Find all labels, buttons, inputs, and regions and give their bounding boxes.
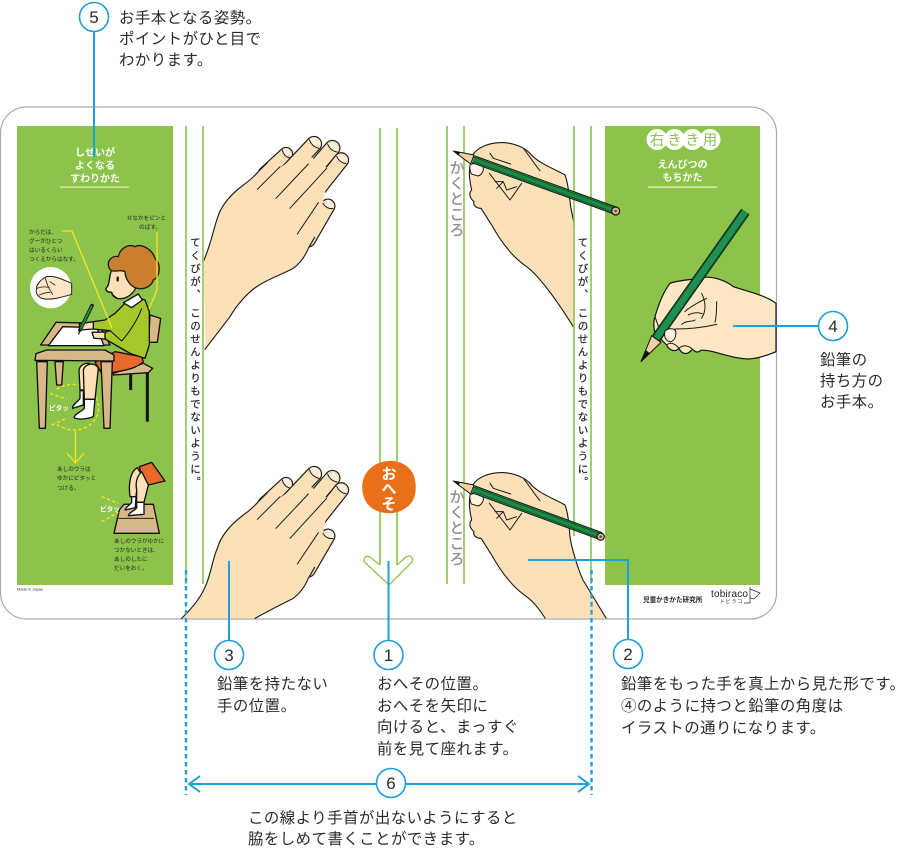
logo: tobiraco [711, 587, 760, 605]
note: distance from desk: はいるくらい [29, 247, 63, 254]
vertical text: right wrist guide: てくびが、 このせんよりもでないように。 [576, 237, 588, 489]
callout 1: navel position [374, 561, 519, 758]
vertical text: writing area lower: かくところ [448, 489, 464, 566]
callout 1: navel position: おへそを矢印に [377, 697, 488, 715]
callout 4: model pencil grip: 4 [828, 317, 838, 336]
badge: right-handed: 用 [703, 133, 717, 149]
callout 5: model posture: ポイントがひと目で [119, 30, 262, 48]
callout 2: writing hand from above [528, 560, 900, 737]
rear leg and foot [73, 363, 89, 408]
callout 3: free hand position: 手の位置。 [217, 697, 296, 715]
pencil in child's hand [79, 306, 92, 334]
callout 5: model posture: わかります。 [119, 51, 213, 69]
note: distance from desk: グーがひとつ [29, 237, 63, 245]
callout 3: free hand position: 3 [224, 646, 234, 665]
illustration: lower writing hand with pencil [453, 473, 606, 618]
callout 4: model pencil grip: 持ち方の [820, 372, 884, 390]
callout 2: writing hand from above: ④のように持つと鉛筆の角度は [621, 697, 843, 715]
heading: posture guide: よくなる [75, 160, 115, 172]
front leg and foot [74, 364, 98, 419]
heading: posture guide [60, 146, 129, 188]
callout 3: free hand position: 鉛筆を持たない [217, 675, 328, 693]
badge: right-handed: 右 [650, 132, 664, 149]
badge: navel marker [362, 461, 416, 513]
hair [108, 246, 159, 289]
badge: right-handed [646, 129, 720, 150]
logo: tobiraco: tobiraco [711, 589, 748, 600]
label: made in japan: Made in Japan [17, 586, 43, 592]
note: use a step: あしのウラがゆかに [114, 537, 165, 545]
illustration: legs on step box [100, 462, 165, 533]
heading: pencil grip: もちかた [662, 172, 702, 184]
note: distance from desk [29, 229, 79, 263]
indicator: foot contact on floor: ピタッ [49, 404, 69, 413]
callout 2: writing hand from above: イラストの通りになります。 [621, 719, 826, 737]
note: straighten back: せなかをピンと [127, 215, 166, 222]
callout 3: free hand position [214, 561, 328, 715]
guide lines: green columns [186, 126, 591, 584]
heading: pencil grip [648, 159, 717, 188]
sweater with arms [93, 298, 149, 358]
callout 5: model posture: お手本となる姿勢。 [119, 9, 262, 27]
callout 4: model pencil grip: 鉛筆の [820, 351, 868, 369]
note: use a step [114, 537, 165, 572]
floor contact arrow [67, 431, 84, 463]
collar [123, 294, 142, 308]
illustration: child seated at desk [35, 246, 161, 428]
logo: tobiraco: トビラコ [720, 598, 743, 605]
heading: posture guide: しせいが [75, 146, 115, 159]
note: feet on floor [57, 465, 96, 492]
note: feet on floor: あしのウラは [57, 465, 91, 473]
yellow pointer lines [62, 231, 157, 328]
indicator: foot contact on floor [49, 384, 99, 430]
vertical text: left wrist guide: てくびが、 このせんよりもでないように。 [189, 237, 201, 489]
chair [113, 315, 161, 422]
note: straighten back: のばす。 [139, 223, 161, 231]
callout 6: wrist limit span: 6 [386, 774, 396, 793]
badge: right-handed: き [667, 132, 682, 149]
icon: fist in circle [30, 267, 72, 308]
callout 4: model pencil grip: お手本。 [820, 393, 884, 411]
hands [79, 322, 105, 339]
illustration: lower non-writing hand [182, 468, 347, 618]
note: feet on floor: ゆかにピタッと [57, 474, 96, 482]
heading: posture guide: すわりかた [70, 173, 120, 185]
panel: posture guide (left green) [17, 126, 173, 585]
note: use a step: つかないときは、 [114, 547, 159, 554]
illustration: model hand gripping pencil [641, 210, 776, 362]
callout 5: model posture: 5 [89, 8, 99, 27]
callout 5: model posture [80, 2, 262, 157]
sheet: writing mat outline [0, 107, 776, 619]
illustration: upper writing hand [469, 143, 574, 328]
callout 2: writing hand from above: 鉛筆をもった手を真上から見た形です。 [621, 675, 900, 693]
note: use a step: あしのしたに [114, 556, 148, 563]
note: straighten back [127, 215, 166, 231]
callout 4: model pencil grip [733, 312, 884, 411]
head [106, 267, 137, 299]
illustration: legs on step box: ピタッ [100, 505, 120, 514]
callout 1: navel position: おへその位置。 [377, 675, 488, 693]
badge: right-handed: き [685, 132, 700, 149]
callout 6: wrist limit span: 脇をしめて書くことができます。 [248, 830, 485, 848]
logo: institute name: 児童かきかた研究所 [643, 595, 703, 604]
badge: navel marker: そ [381, 496, 397, 513]
callout 1: navel position: 1 [384, 646, 393, 665]
badge: navel marker: お [381, 466, 397, 483]
vertical text: writing area upper: かくところ [448, 160, 464, 238]
shorts [95, 352, 143, 373]
illustration: upper pencil [453, 151, 620, 215]
note: use a step: だいをおく。 [114, 565, 148, 572]
desk [35, 322, 114, 428]
badge: navel marker: へ [381, 481, 397, 498]
illustration: upper non-writing hand [204, 138, 347, 349]
note: distance from desk: つくえからはなす。 [29, 256, 79, 263]
heading: pencil grip: えんぴつの [658, 159, 708, 171]
arrow: navel guide arrowhead [364, 556, 413, 585]
callout 1: navel position: 前を見て座れます。 [377, 740, 518, 758]
callout 6: wrist limit span: この線より手首が出ないようにすると [248, 809, 518, 827]
note: distance from desk: からだは、 [29, 229, 57, 236]
callout 1: navel position: 向けると、まっすぐ [377, 718, 519, 736]
callout 6: wrist limit span [186, 570, 592, 848]
panel: pencil grip guide (right green) [605, 126, 760, 585]
note: feet on floor: つける。 [57, 485, 79, 492]
callout 2: writing hand from above: 2 [623, 645, 633, 664]
